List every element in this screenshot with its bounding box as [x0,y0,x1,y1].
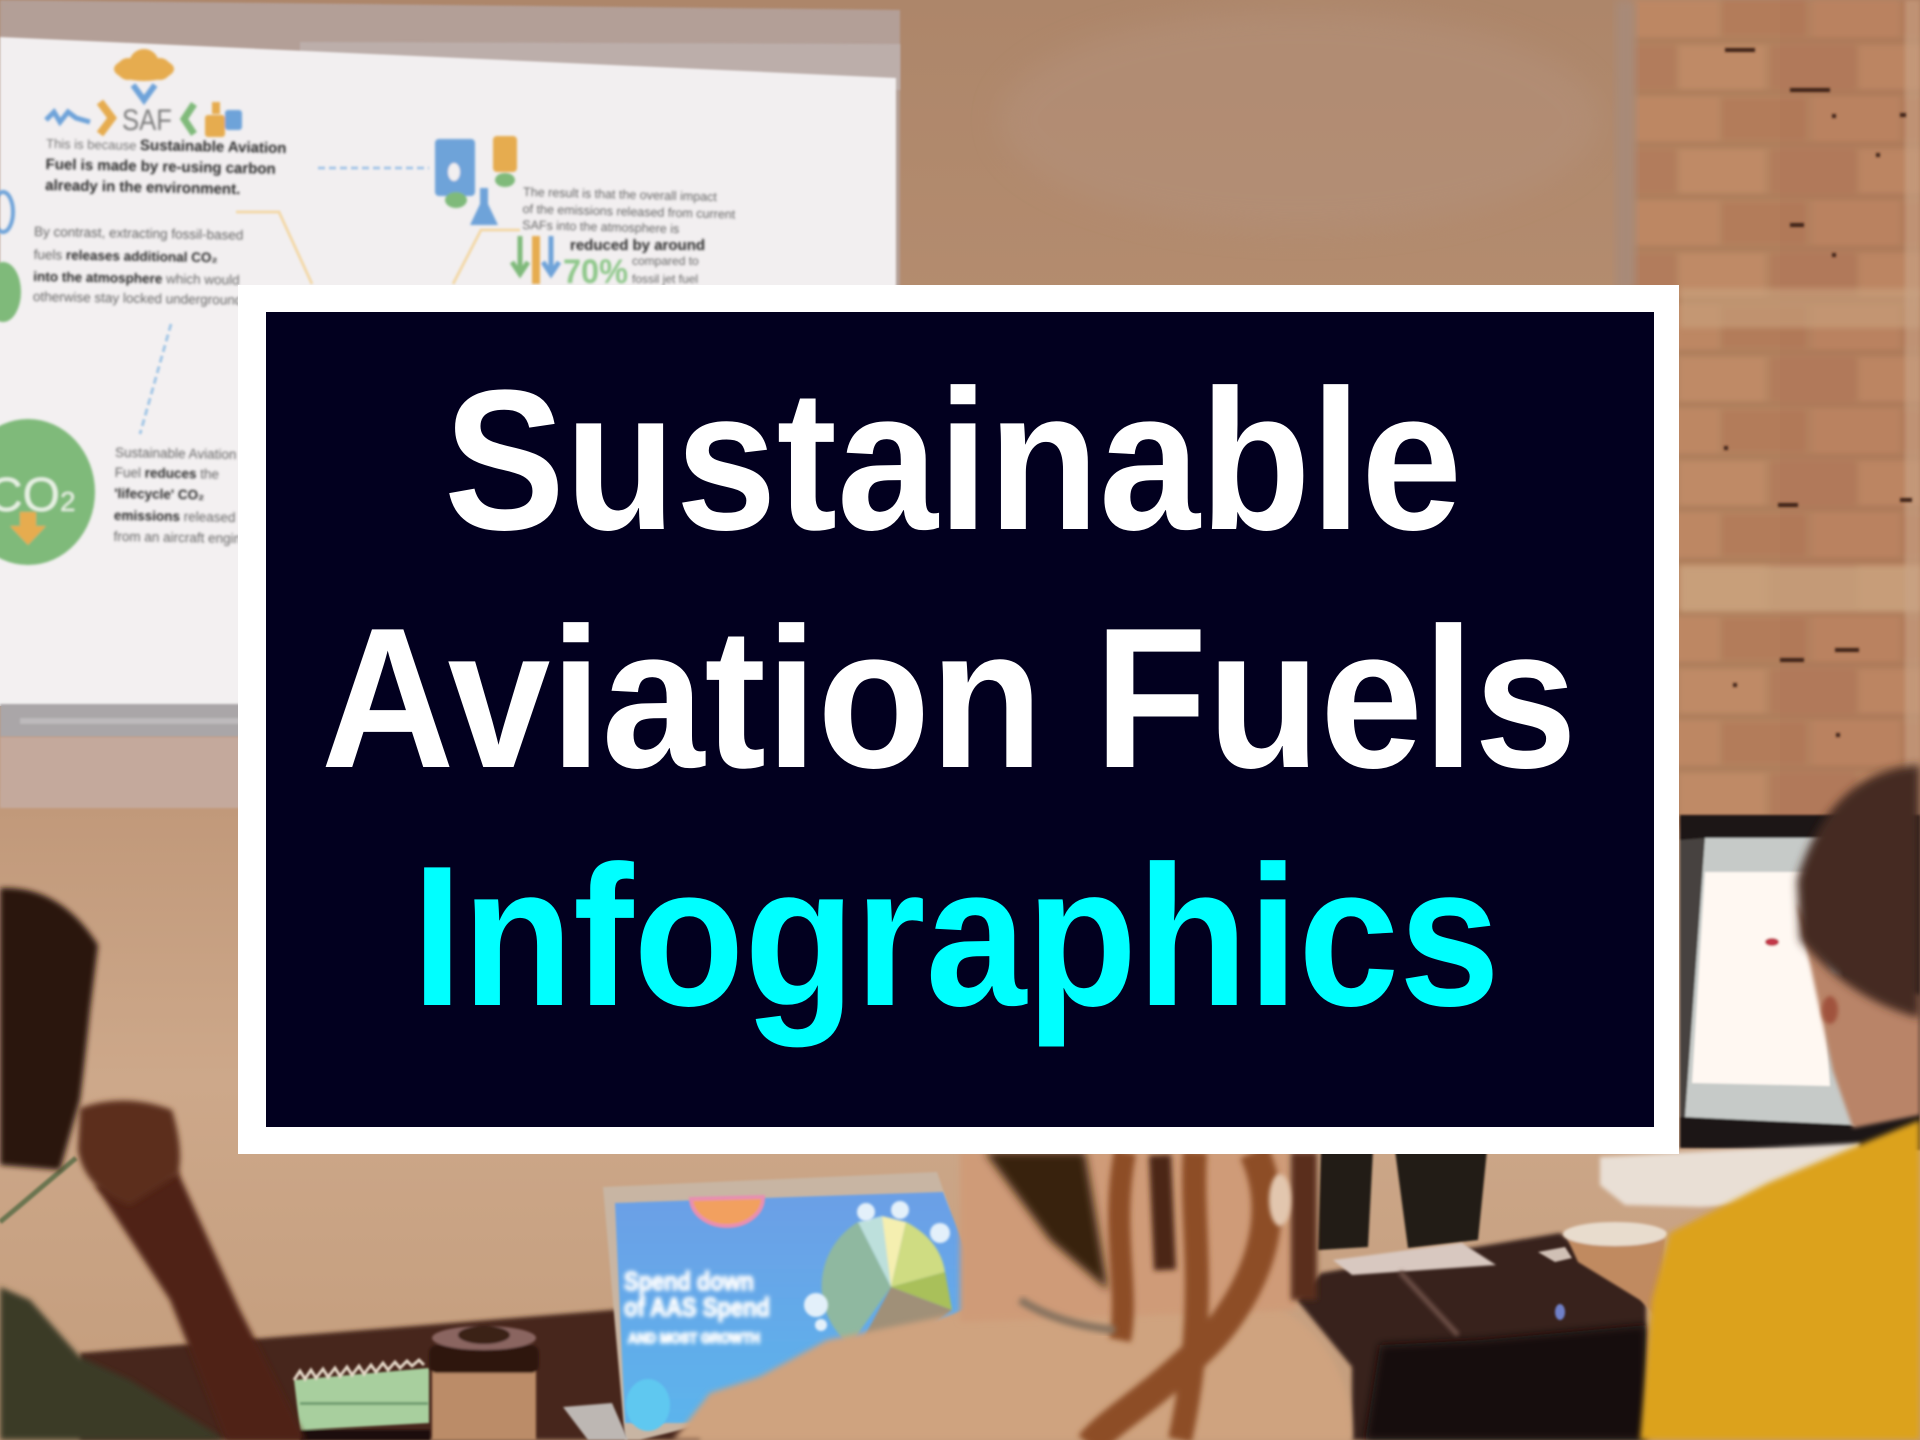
yellow shirt [1640,1120,1920,1440]
icon: orange chevron [100,102,112,134]
heading line 2: Aviation Fuels [321,587,1577,810]
icon: blue tank [435,139,475,208]
cyan circle [626,1379,670,1431]
text: lifecycle emissions: released [184,509,236,525]
text: fossil fuel contrast: releases additional CO₂ [66,248,218,265]
neck and face [1797,903,1920,1128]
text: fossil fuel contrast: fuels [34,247,66,263]
keyboard [1333,1243,1496,1275]
screen housing [0,0,900,290]
hair strands [1090,1152,1304,1440]
hand [78,1100,180,1205]
text: SAF explanation: Fuel is made by re-using carbon [45,156,276,178]
blurred screen text [33,135,736,546]
icon: wiggle lines [46,112,90,122]
SAF label: SAF [122,104,172,137]
table [80,1300,700,1440]
text: lifecycle emissions: emissions [114,508,184,524]
text: lifecycle emissions: Sustainable Aviation [115,445,237,462]
brick pillar [1616,0,1920,830]
left man [0,888,306,1440]
screen bottom bar [0,704,300,737]
shirt [0,1287,226,1440]
text: result: The result is that the overall impact [523,185,718,204]
text: lifecycle emissions: 'lifecycle' CO₂ [114,486,204,503]
necklace [1020,1300,1115,1330]
screen grey strip [300,42,900,90]
projector screen [0,0,900,808]
icon: left earth edge [0,192,21,322]
white frame [238,285,1679,1154]
text: result: SAFs into the atmosphere is [522,218,679,236]
cable [1400,1272,1458,1335]
screen white area [0,37,896,710]
laptop keyboard corner [563,1403,628,1440]
pie chart [822,1216,952,1345]
woman seated [673,1152,1352,1440]
icon: bottles [205,102,242,137]
laptop lid [603,1172,950,1440]
arm [95,1172,306,1440]
icon: orange tank [493,136,517,187]
takeaway cup left [429,1326,539,1440]
navy panel [266,312,1654,1127]
text: reduced by around: reduced by around [570,237,705,254]
standing presenter legs [1318,1150,1487,1250]
text: SAF explanation: already in the environment. [45,177,240,198]
paper cup right [1563,1222,1667,1320]
neck [960,1152,1296,1322]
right monitor [1680,815,1920,1150]
laptop slide text: AND MOST GROWTH [628,1330,760,1347]
pie labels dots [804,1201,950,1331]
hair [1797,765,1920,1018]
icon: cloud [114,49,174,81]
wall shading patch [1000,10,1600,230]
right man [1640,765,1920,1440]
ear [1822,996,1838,1024]
pencil [0,1158,76,1222]
ear [1269,1174,1291,1226]
monitor stand base [1600,1143,1860,1207]
icon: reduction arrows [512,236,559,284]
head [0,888,98,1170]
laptop slide text: Spend down [624,1266,754,1296]
title card [238,285,1679,1154]
orange half circle [691,1197,763,1226]
text: result: of the emissions released from current [522,202,736,222]
text: 70 percent: 70% [563,253,628,291]
text: fossil fuel contrast: otherwise stay locked underground [33,289,242,308]
text: lifecycle emissions: Fuel [115,465,145,481]
notebook [294,1360,430,1440]
text: fossil fuel contrast: into the atmosphere [33,269,166,286]
icon: flask [470,188,498,225]
text: compared to fossil: compared to [632,254,699,268]
text: fossil fuel contrast: By contrast, extracting fossil-based [34,224,244,243]
text: lifecycle emissions: reduces the [145,466,219,482]
icon: blue chevron [133,85,155,100]
heading line 1: Sustainable [444,349,1462,572]
dashed and thin connector lines [140,168,520,434]
back and shoulders [673,1307,1352,1440]
laptop slide text: of AAS Spend [624,1292,770,1322]
text: compared to fossil: fossil jet fuel [632,272,698,286]
text: lifecycle emissions: from an aircraft engine [113,529,249,546]
right table device [1297,1233,1646,1440]
hair dark [985,1152,1108,1290]
paper [1538,1247,1572,1262]
SAF diagram icons [0,49,559,322]
heading line 3: Infographics [412,825,1500,1048]
screen lower housing [0,737,300,808]
text: SAF explanation: This is because Sustainable Aviation [46,136,287,157]
laptop screen [615,1192,985,1423]
icon: green CO2 circle [0,419,95,565]
laptop slide text [624,1266,770,1347]
laptop [563,1172,985,1440]
icon: green chevron [184,104,194,134]
blue LED [1555,1304,1565,1320]
device body [1297,1233,1646,1440]
device front [1365,1325,1646,1440]
text: fossil fuel contrast: which would [165,271,240,288]
